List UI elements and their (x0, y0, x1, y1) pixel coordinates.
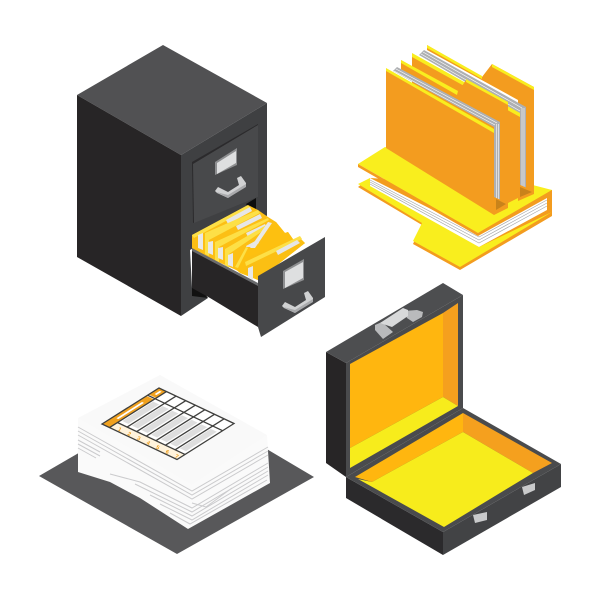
base floor (358, 432, 533, 527)
front folder (386, 60, 508, 215)
table row numbers: 7 (174, 454, 179, 460)
front folder slot (494, 197, 508, 215)
front folder pages (393, 67, 500, 203)
rear folder flap (427, 45, 534, 200)
filing cabinet (77, 45, 325, 337)
table header (102, 396, 154, 428)
folder and book (358, 45, 552, 270)
front handle (282, 291, 313, 313)
rear folder slot (518, 184, 534, 201)
paper stack (39, 375, 314, 554)
dark sheet (39, 396, 314, 554)
cabinet body (77, 45, 267, 316)
row shading (122, 402, 159, 424)
briefcase handle (375, 308, 423, 339)
front folder panel (386, 69, 494, 215)
table row numbers: 4 (145, 440, 152, 447)
briefcase base (346, 408, 561, 555)
table (102, 388, 234, 460)
rear folder pages (419, 50, 526, 192)
book bottom cover (358, 178, 552, 270)
drawer label (215, 148, 237, 175)
rear folder (412, 45, 534, 203)
lid interior back (350, 313, 443, 448)
open drawer (192, 198, 325, 337)
front folder flap (401, 60, 508, 205)
top sheet (78, 375, 267, 485)
drawer interior opening (246, 198, 256, 212)
lid interior right wall (443, 303, 458, 406)
lid interior lower wall (350, 397, 458, 468)
upper closed drawer (192, 124, 258, 223)
grid lines (102, 388, 234, 460)
table cells and grid (102, 388, 234, 460)
table row numbers: 5 (155, 445, 160, 451)
front folder (245, 238, 305, 280)
book pages (370, 178, 547, 247)
rear folder front panel (412, 54, 520, 203)
briefcase lid (326, 283, 463, 477)
drawer front face (258, 237, 325, 337)
latch right (522, 483, 535, 495)
latch left (473, 512, 487, 523)
tilted folder (233, 222, 305, 280)
book top cover (358, 147, 552, 236)
front label (283, 259, 304, 289)
row number cells (110, 423, 185, 460)
table row numbers: 3 (136, 436, 141, 442)
base left wall (355, 413, 463, 482)
table row numbers (117, 427, 179, 460)
paper edges (78, 418, 270, 529)
table row numbers: 1 (117, 427, 122, 433)
table row numbers: 6 (164, 449, 170, 456)
drawer handle (215, 176, 246, 198)
open briefcase (326, 283, 561, 555)
drawer side (192, 250, 258, 327)
table row numbers: 2 (126, 431, 132, 438)
base right wall (463, 413, 552, 473)
file folders (192, 205, 305, 280)
